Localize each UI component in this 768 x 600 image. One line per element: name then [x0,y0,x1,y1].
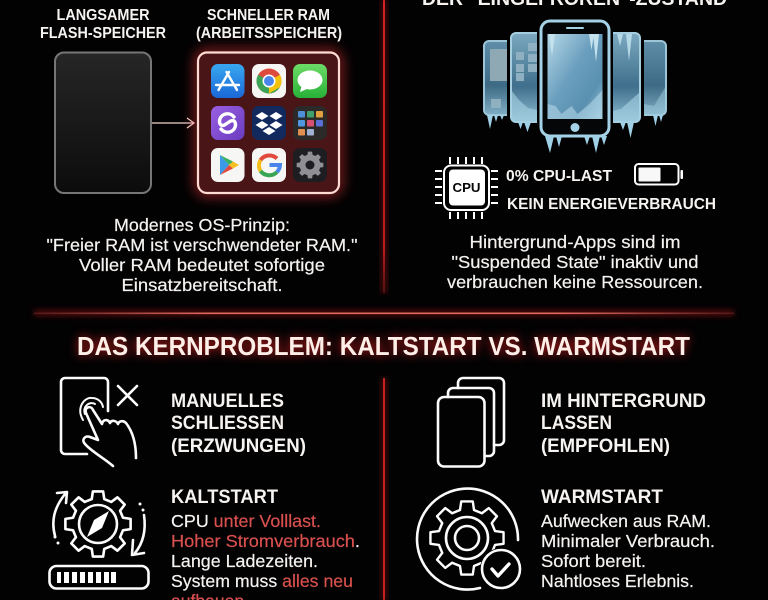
text: OS principle: Einsatzbereitschaft. [122,275,282,295]
heading: manuelles Schliessen: (ERZWUNGEN) [171,436,306,457]
text: Kaltstart [171,487,360,600]
label: langsamer Flash-Speicher: LANGSAMER [56,7,150,24]
icon: stacked app cards [438,378,504,466]
text: OS principle: Modernes OS-Prinzip: [114,215,290,235]
heading: Kernproblem: DAS KERNPROBLEM: KALTSTART VS. WARMSTART [77,333,690,361]
text: Warmstart: Minimaler Verbrauch. [541,531,715,551]
icon: CPU chip: CPU [452,181,480,195]
text: Warmstart: Nahtloses Erlebnis. [541,571,694,591]
icon: Dropbox [252,106,286,140]
heading: im Hintergrund lassen [541,391,706,457]
text: Warmstart [541,487,715,591]
icon: Play Store [211,148,244,182]
heading: manuelles Schliessen [171,391,306,457]
icon: App Store [211,64,244,98]
heading: im Hintergrund lassen: IM HINTERGRUND [541,391,706,412]
label: schneller RAM: SCHNELLER RAM [207,7,330,24]
icon: battery [635,164,683,184]
text: Warmstart: Aufwecken aus RAM. [541,511,711,531]
text: Warmstart: WARMSTART [541,487,663,508]
icon: Shazam [211,106,244,140]
label: schneller RAM: (ARBEITSSPEICHER) [196,25,342,42]
text: Kaltstart: Lange Ladezeiten. [171,551,318,571]
icon: frozen phones [484,21,666,153]
icon: warm start gear and check [417,489,522,590]
text: OS principle: "Freier RAM ist verschwendeter RAM." [46,235,358,255]
text: Kaltstart: System muss alles neu [171,571,353,591]
horizontal divider [34,310,734,316]
panel: manuelles Schliessen / Kaltstart [50,378,360,600]
stat: kein Energieverbrauch: KEIN ENERGIEVERBRAUCH [507,196,716,213]
label: schneller RAM [196,7,342,42]
text: Kaltstart: CPU unter Volllast. [171,511,321,531]
panel: eingefrorener Zustand [422,0,727,292]
icon: Google [252,148,286,182]
heading: im Hintergrund lassen: LASSEN [541,413,612,434]
icon: swipe hand closing app [61,378,137,466]
text: suspended state [447,232,703,292]
text: OS principle [46,215,358,295]
text: suspended state: "Suspended State" inaktiv und [452,252,698,272]
heading: im Hintergrund lassen: (EMPFOHLEN) [541,436,670,457]
inner left phone [511,33,537,132]
outer left phone [484,41,507,129]
flash storage box [55,52,151,193]
center phone [541,21,609,153]
icon: app grid [293,106,327,140]
icon: Chrome [252,64,286,98]
panel: RAM-Verwaltung [40,7,358,295]
text: Kaltstart: KALTSTART [171,487,278,508]
lower vertical divider [380,378,388,600]
heading: manuelles Schliessen: MANUELLES [171,391,284,412]
RAM box with glow [198,52,339,193]
arrow: flash to RAM [152,118,194,128]
icon: CPU chip [435,157,498,219]
text: suspended state: verbrauchen keine Ressourcen. [447,272,703,292]
text: Warmstart: Sofort bereit. [541,551,646,571]
inner right phone [613,33,640,138]
icon: Settings [293,148,327,182]
icon: Messages [293,64,327,98]
top vertical divider [380,0,388,293]
text: suspended state: Hintergrund-Apps sind im [470,232,680,252]
panel: im Hintergrund lassen / Warmstart [417,378,715,591]
label: langsamer Flash-Speicher: FLASH-SPEICHER [40,25,166,42]
stat: 0% CPU-Last: 0% CPU-LAST [506,168,612,185]
text: Kaltstart: Hoher Stromverbrauch . [171,531,360,551]
text: OS principle: Voller RAM bedeutet sofortige [79,255,325,275]
heading: manuelles Schliessen: SCHLIESSEN [171,413,284,434]
outer right phone [644,41,666,126]
label: langsamer Flash-Speicher [40,7,166,42]
icon: cold start gear and progress [50,491,148,588]
